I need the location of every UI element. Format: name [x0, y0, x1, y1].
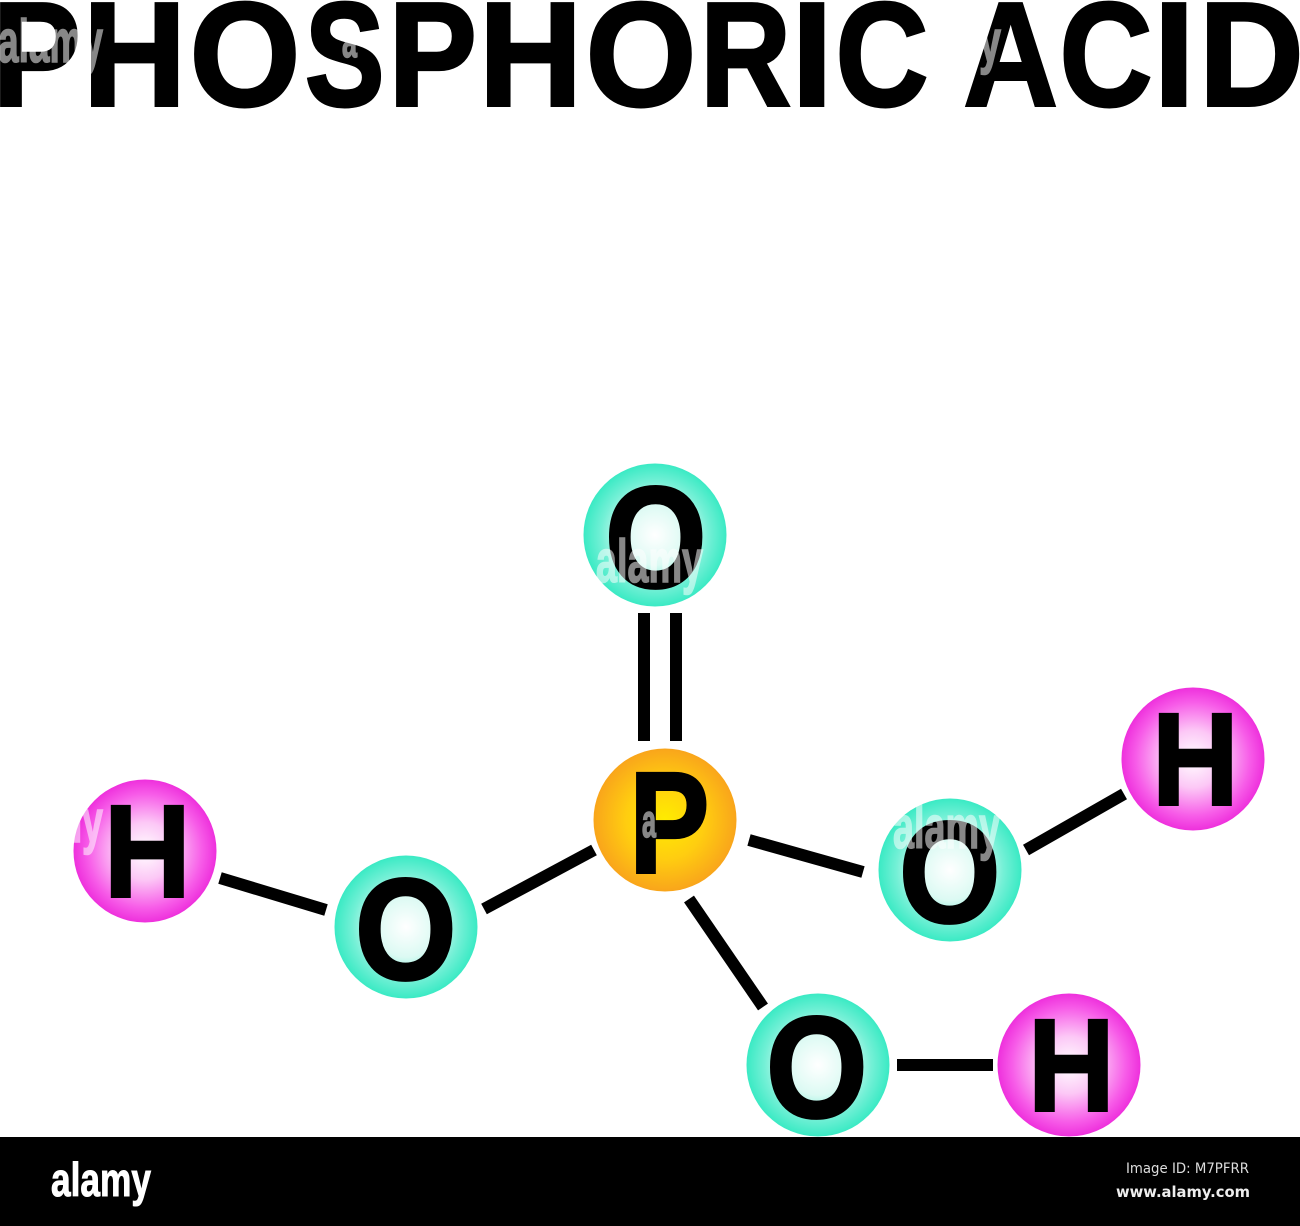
atom: left hydrogen	[74, 778, 216, 924]
atom: phosphorus	[594, 742, 736, 904]
atom: top oxygen: O	[605, 457, 706, 618]
watermark bar: alamy	[51, 1153, 151, 1206]
atom: upper right hydrogen: H	[1152, 686, 1238, 832]
watermark bar: Image ID: M7PFRR	[1126, 1161, 1249, 1177]
watermarks: a	[642, 795, 656, 847]
atom: phosphorus: P	[629, 742, 709, 904]
atom: bottom hydrogen	[998, 992, 1140, 1138]
watermark bar	[0, 1137, 1300, 1226]
atom: left hydrogen: H	[104, 778, 190, 924]
watermarks: y	[979, 8, 1001, 75]
watermarks: alamy	[893, 794, 1000, 861]
watermarks: a	[342, 15, 357, 67]
atom: bottom oxygen: O	[766, 987, 868, 1148]
atom: right oxygen: O	[899, 792, 1000, 953]
watermarks: alamy	[0, 8, 103, 75]
atom: bottom hydrogen: H	[1028, 992, 1114, 1138]
watermark bar: www.alamy.com	[1116, 1183, 1250, 1201]
atom: upper right hydrogen	[1122, 686, 1264, 832]
watermarks	[0, 8, 1001, 861]
atom: left oxygen: O	[355, 849, 456, 1010]
watermarks: alamy	[0, 788, 103, 855]
bonds	[220, 613, 1124, 1065]
watermarks: alamy	[596, 528, 703, 595]
